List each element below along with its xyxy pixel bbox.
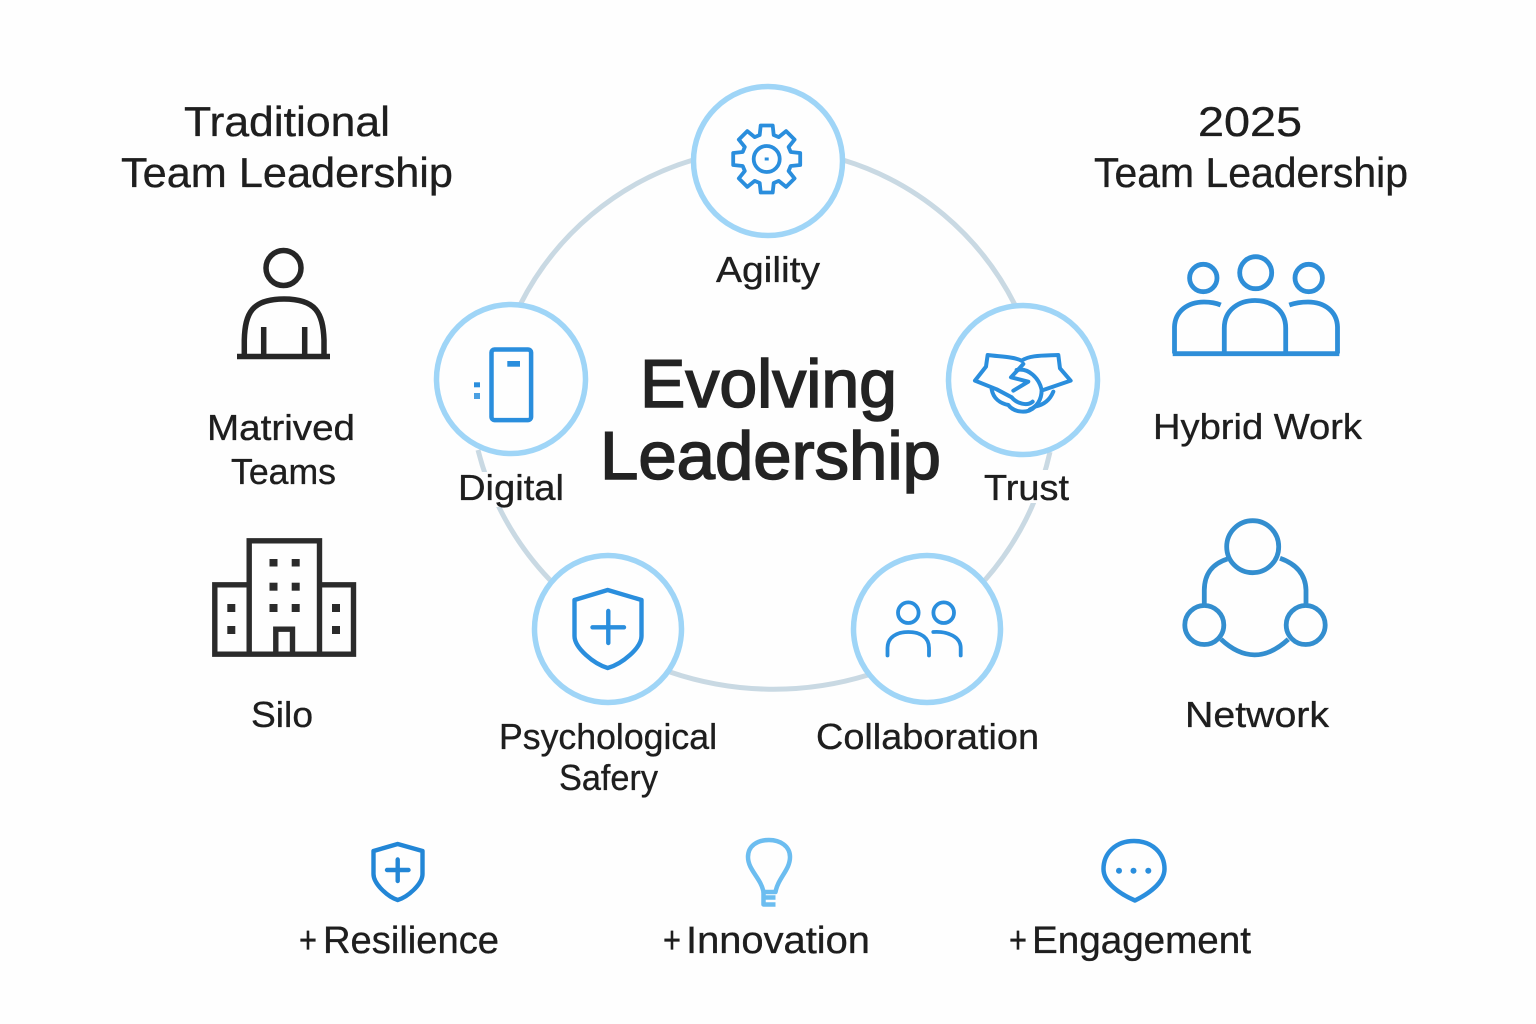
- icon: handshake: [975, 355, 1071, 412]
- icon: engagement chat bubble: [1104, 841, 1164, 900]
- node: digital: [436, 304, 586, 454]
- heading: traditional team leadership: [121, 98, 453, 196]
- icon: silo building: [215, 541, 354, 654]
- label: matrived teams: Teams: [231, 451, 336, 492]
- heading: traditional team leadership: Traditional: [184, 98, 390, 145]
- title: Evolving: [640, 346, 897, 422]
- label: hybrid work: Hybrid Work: [1153, 406, 1363, 447]
- label: engagement: Engagement: [1032, 920, 1251, 962]
- label: network: Network: [1185, 694, 1330, 735]
- label: matrived teams: Matrived: [207, 407, 355, 448]
- label: engagement: +: [1009, 920, 1027, 962]
- label: agility: Agility: [716, 249, 820, 290]
- title: [600, 346, 941, 494]
- label: psychological safery: Safery: [559, 757, 658, 798]
- node: trust: [948, 306, 1098, 454]
- heading: traditional team leadership: Team Leadership: [121, 149, 453, 196]
- label: psychological safery: [499, 716, 717, 798]
- icon: gear: [733, 126, 800, 192]
- label: trust: Trust: [984, 467, 1069, 508]
- heading: 2025 team leadership: 2025: [1198, 98, 1302, 145]
- heading: 2025 team leadership: Team Leadership: [1094, 149, 1408, 196]
- icon: matrixed team person: [237, 250, 330, 356]
- label: matrived teams: [207, 407, 355, 492]
- label: resilience: +: [299, 920, 317, 962]
- icon: hybrid work group: [1173, 257, 1339, 354]
- label: innovation: Innovation: [686, 920, 870, 962]
- connecting ring: [456, 160, 1072, 689]
- label: collaboration: Collaboration: [816, 716, 1039, 757]
- icon: two people: [888, 602, 961, 656]
- label: silo: Silo: [251, 694, 313, 735]
- label: resilience: Resilience: [323, 920, 499, 962]
- label: innovation: +: [663, 920, 681, 962]
- label: digital: Digital: [458, 467, 564, 508]
- icon: network: [1185, 521, 1325, 655]
- icon: phone: [474, 350, 531, 420]
- label: psychological safery: Psychological: [499, 716, 717, 757]
- node: agility: [694, 86, 842, 236]
- heading: 2025 team leadership: [1094, 98, 1408, 196]
- node: collaboration: [854, 556, 1000, 702]
- icon: resilience shield: [374, 844, 422, 900]
- icon: shield plus: [574, 590, 642, 668]
- node: psychological safety: [534, 556, 682, 702]
- title: Leadership: [600, 418, 941, 494]
- icon: innovation bulb: [748, 840, 790, 904]
